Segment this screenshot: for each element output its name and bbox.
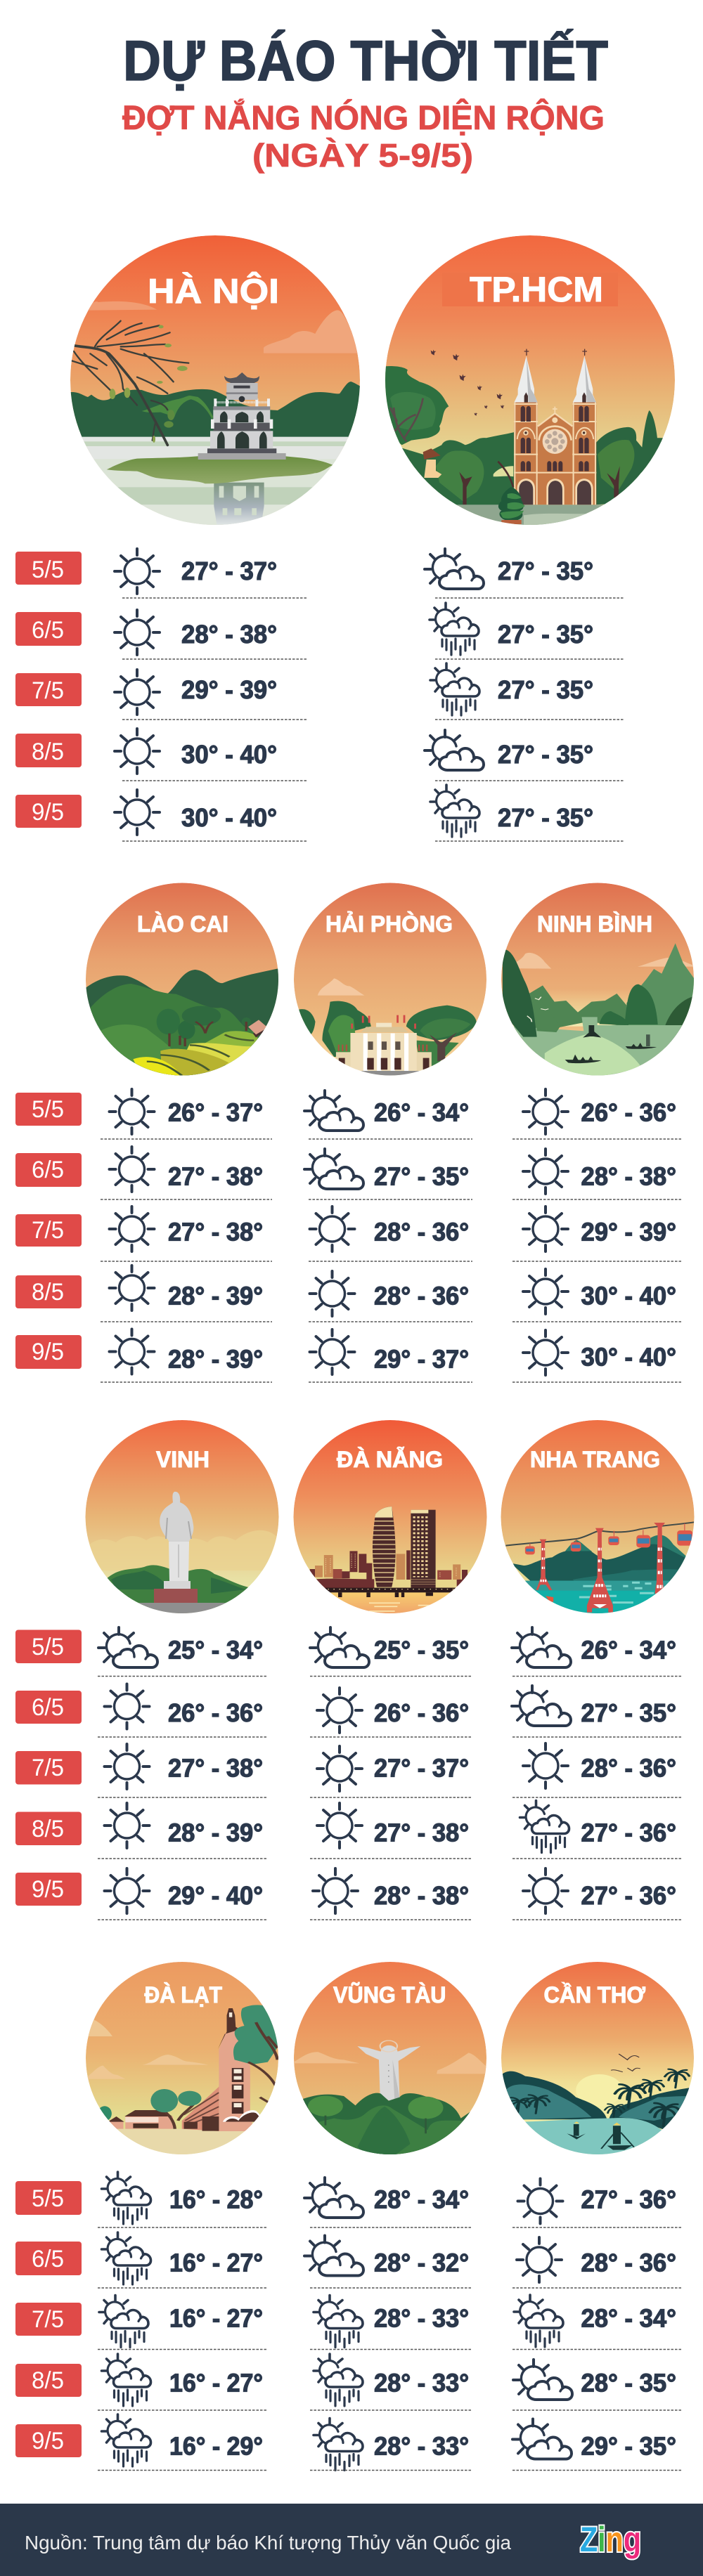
row 8/5 (309, 1271, 469, 1316)
row 8/5 (520, 1800, 676, 1852)
tree (162, 2105, 193, 2129)
scene: Lào Cai (84, 883, 279, 1079)
row 7/5: 27° - 37° (374, 1754, 469, 1782)
row 9/5 (309, 1329, 469, 1374)
forecast: Đà Nẵng (310, 1627, 472, 1920)
date badges (15, 1093, 82, 1369)
date badges: 8/5 (32, 1816, 64, 1842)
date badges: 7/5 (32, 2306, 64, 2333)
row 7/5 (104, 1744, 263, 1789)
date badges: 9/5 (32, 799, 64, 826)
date badges: 8/5 (32, 1279, 64, 1306)
row 5/5: 27° - 36° (581, 2185, 676, 2213)
label: Nha Trang: NHA TRANG (530, 1447, 660, 1472)
trees (157, 1009, 180, 1034)
row 5/5 (310, 1627, 469, 1667)
date badges: 5/5 (32, 1096, 64, 1123)
section: Hà Nội and TP.HCM (15, 235, 675, 841)
row 6/5: 27° - 38° (168, 1162, 263, 1190)
row 9/5 (314, 2419, 469, 2471)
karst mountains (529, 985, 627, 1028)
date badges: 7/5 (32, 1755, 64, 1781)
birds (431, 350, 436, 356)
row 5/5 (110, 1089, 263, 1134)
boats (567, 2133, 586, 2140)
row 7/5: 27° - 38° (168, 1754, 263, 1782)
row 8/5: 28° - 36° (374, 1282, 469, 1310)
row 7/5: 29° - 39° (181, 675, 277, 704)
row 5/5: 27° - 37° (181, 557, 277, 585)
trees left (383, 366, 449, 445)
row 5/5 (523, 1089, 676, 1134)
scene: Hải Phòng (294, 883, 486, 1076)
row 6/5 (430, 603, 593, 655)
row 9/5: 30° - 40° (581, 1342, 676, 1372)
row 8/5: 27° - 36° (581, 1819, 676, 1847)
row 5/5: 26° - 34° (581, 1636, 676, 1664)
row 9/5: 28° - 33° (374, 2431, 469, 2461)
row 6/5: 26° - 36° (168, 1698, 263, 1727)
bridge (325, 1588, 457, 1592)
island (107, 456, 333, 483)
row 8/5 (513, 2360, 676, 2400)
date badges: 6/5 (32, 1694, 64, 1721)
date badges: 9/5 (32, 1339, 64, 1365)
row 8/5: 28° - 33° (374, 2368, 469, 2398)
row 6/5 (115, 610, 277, 655)
row 7/5: 28° - 34° (581, 2303, 676, 2333)
row 9/5 (523, 1868, 676, 1913)
row 9/5: 29° - 40° (168, 1881, 263, 1910)
mountains (565, 1535, 689, 1559)
row 8/5 (101, 2354, 263, 2406)
main building (125, 2116, 173, 2129)
date badges: 5/5 (32, 557, 64, 583)
forecast: Hải Phòng (304, 1091, 472, 1382)
source: Nguồn: Trung tâm dự báo Khí tượng Thủy văn Quốc gia (25, 2532, 511, 2554)
forecast: Lào Cai (101, 1089, 272, 1382)
row 8/5 (317, 1803, 469, 1848)
row 7/5: 28° - 33° (374, 2303, 469, 2333)
row 8/5 (110, 1266, 263, 1310)
row 8/5 (425, 730, 593, 770)
row 5/5: 25° - 35° (374, 1636, 469, 1664)
row 8/5: 28° - 35° (581, 2368, 676, 2398)
title: DỰ BÁO THỜI TIẾT (123, 29, 608, 93)
tower 1 (373, 1507, 396, 1587)
hills (301, 2093, 486, 2157)
row 6/5 (101, 2232, 263, 2284)
gondolas (530, 1523, 685, 1547)
tree right (233, 2005, 283, 2064)
date badges (15, 1630, 82, 1906)
Turtle Tower (198, 372, 286, 460)
row 5/5: 28° - 34° (374, 2185, 469, 2213)
tower 2 (411, 1510, 436, 1588)
row 9/5 (110, 1329, 263, 1374)
row 9/5: 16° - 29° (169, 2431, 263, 2461)
subtitle: (NGÀY 5-9/5) (252, 137, 473, 174)
ground (457, 505, 604, 525)
label: Hải Phòng: HẢI PHÒNG (325, 911, 453, 937)
subtitle: ĐỢT NẮNG NÓNG DIỆN RỘNG (122, 98, 605, 137)
trees right (595, 410, 663, 505)
row 9/5 (104, 1868, 263, 1913)
sea (505, 1581, 697, 1616)
date badges: 6/5 (32, 1157, 64, 1183)
row 6/5: 28° - 32° (374, 2249, 469, 2277)
forecast: TP.HCM (425, 549, 624, 841)
label: Cần Thơ: CẦN THƠ (544, 1982, 646, 2008)
section: Lào Cai, Hải Phòng, Ninh Bình (15, 883, 697, 1382)
forecast: Ninh Bình (512, 1089, 683, 1382)
row 5/5 (304, 1091, 469, 1131)
house (253, 1030, 264, 1038)
date badges: 9/5 (32, 1876, 64, 1903)
forecast: Nha Trang (512, 1627, 683, 1920)
scalloped roof (223, 2110, 263, 2122)
date badges: 5/5 (32, 2185, 64, 2212)
row 5/5: 26° - 37° (168, 1098, 263, 1127)
trees (299, 1009, 316, 1034)
label: Đà Lạt: ĐÀ LẠT (145, 1982, 222, 2008)
row 8/5 (115, 729, 277, 774)
row 9/5: 29° - 35° (581, 2431, 676, 2461)
label: TP.HCM: TP.HCM (470, 270, 603, 309)
potted plant (498, 462, 513, 487)
date badges: 8/5 (32, 2367, 64, 2394)
reflection (214, 483, 264, 525)
row 7/5: 28° - 36° (581, 1754, 676, 1782)
label: Lào Cai: LÀO CAI (137, 911, 228, 937)
row 7/5 (110, 1206, 263, 1251)
label: Vũng Tàu: VŨNG TÀU (333, 1982, 446, 2008)
row 9/5 (512, 2419, 676, 2461)
row 6/5: 28° - 38° (181, 620, 277, 649)
row 7/5 (314, 2295, 469, 2347)
row 7/5 (514, 2295, 676, 2347)
row 9/5: 27° - 35° (498, 803, 593, 832)
row 7/5 (99, 2295, 263, 2347)
scene: Ninh Bình (501, 883, 697, 1078)
opera house (336, 1015, 432, 1076)
row 7/5: 29° - 39° (581, 1217, 676, 1247)
row 7/5 (523, 1206, 676, 1251)
date badges: 6/5 (32, 2246, 64, 2272)
scene: Nha Trang (501, 1420, 697, 1616)
cable (505, 1522, 694, 1546)
Ho Chi Minh statue (154, 1492, 198, 1603)
forecast: Hà Nội (115, 549, 308, 841)
footer (0, 2504, 703, 2576)
row 5/5: 16° - 28° (169, 2185, 263, 2213)
scene: Vũng Tàu (291, 1962, 490, 2157)
branch (72, 321, 188, 445)
row 6/5: 26° - 36° (374, 1698, 469, 1727)
row 5/5 (115, 549, 277, 594)
row 9/5 (523, 1330, 676, 1375)
label: Đà Nẵng: ĐÀ NẴNG (337, 1447, 443, 1472)
row 5/5 (512, 1627, 676, 1667)
row 6/5: 28° - 36° (581, 2249, 676, 2277)
row 5/5 (98, 1627, 263, 1667)
row 5/5 (517, 2178, 676, 2223)
row 7/5: 28° - 36° (374, 1217, 469, 1247)
label: Ninh Bình: NINH BÌNH (537, 911, 652, 937)
rice terraces (205, 1031, 258, 1064)
date badges: 6/5 (32, 617, 64, 644)
row 8/5: 27° - 38° (374, 1819, 469, 1847)
hills (500, 2071, 607, 2119)
river (513, 1017, 682, 1075)
row 5/5 (101, 2172, 263, 2224)
row 7/5: 27° - 35° (498, 675, 593, 704)
row 9/5: 27° - 36° (581, 1881, 676, 1910)
row 6/5 (523, 1149, 676, 1194)
row 8/5: 27° - 35° (498, 740, 593, 769)
forecast: Cần Thơ (512, 2178, 683, 2471)
row 9/5 (101, 2414, 263, 2466)
row 5/5: 27° - 35° (498, 557, 593, 585)
tower (219, 2027, 250, 2131)
date badges: 5/5 (32, 1634, 64, 1660)
date badges: 8/5 (32, 739, 64, 765)
row 7/5 (523, 1743, 676, 1788)
row 6/5 (517, 2237, 676, 2282)
hills (105, 1565, 252, 1609)
row 7/5 (309, 1206, 469, 1251)
row 6/5 (104, 1684, 263, 1729)
row 6/5: 28° - 38° (581, 1162, 676, 1190)
small building (110, 2121, 123, 2129)
date badges (15, 552, 82, 828)
water (82, 437, 349, 505)
row 5/5: 26° - 34° (374, 1098, 469, 1127)
forecast: Vinh (98, 1627, 267, 1920)
row 8/5: 30° - 40° (181, 740, 277, 769)
seagulls (527, 997, 548, 1022)
scene: Đà Nẵng (294, 1420, 486, 1616)
row 8/5 (104, 1803, 263, 1848)
row 7/5: 27° - 38° (168, 1217, 263, 1247)
scene: TP.HCM (383, 235, 675, 527)
section: Vinh, Đà Nẵng, Nha Trang (15, 1420, 697, 1920)
row 6/5 (317, 1688, 469, 1733)
water (525, 2118, 697, 2157)
Notre Dame cathedral (514, 349, 596, 505)
palms (665, 2069, 689, 2088)
row 5/5 (304, 2178, 469, 2218)
Christ statue (357, 2041, 420, 2101)
label: Hà Nội: HÀ NỘI (148, 272, 279, 311)
row 8/5: 30° - 40° (581, 1282, 676, 1310)
row 9/5 (430, 785, 593, 837)
forecast: Vũng Tàu (304, 2178, 472, 2471)
house (423, 448, 441, 460)
date badges: 7/5 (32, 1217, 64, 1244)
row 6/5 (110, 1147, 263, 1192)
row 6/5 (512, 1686, 676, 1727)
row 9/5: 30° - 40° (181, 803, 277, 832)
logo: Zing: Zing (580, 2520, 641, 2559)
label: Vinh: VINH (156, 1447, 209, 1472)
leaves (110, 325, 188, 443)
row 8/5 (523, 1269, 676, 1314)
row 6/5: 27° - 35° (498, 620, 593, 649)
row 9/5: 28° - 38° (374, 1881, 469, 1910)
row 9/5: 28° - 39° (168, 1345, 263, 1373)
row 6/5: 27° - 35° (581, 1698, 676, 1727)
row 6/5: 16° - 27° (169, 2249, 263, 2277)
cable towers (536, 1523, 665, 1613)
row 8/5: 16° - 27° (169, 2368, 263, 2398)
row 8/5: 28° - 39° (168, 1282, 263, 1310)
skyline (315, 1554, 460, 1580)
row 5/5: 26° - 36° (581, 1098, 676, 1127)
row 7/5 (430, 663, 593, 715)
row 8/5 (314, 2354, 469, 2406)
date badges: 7/5 (32, 677, 64, 704)
subtitle (122, 98, 605, 174)
scene: Hà Nội (67, 235, 364, 528)
scene: Vinh (84, 1420, 281, 1617)
row 6/5: 27° - 35° (374, 1162, 469, 1190)
row 9/5 (115, 790, 277, 835)
date badges (15, 2181, 82, 2457)
section: Đà Lạt, Vũng Tàu, Cần Thơ (15, 1962, 697, 2471)
wing (182, 2087, 219, 2131)
row 9/5: 29° - 37° (374, 1345, 469, 1373)
date badges: 9/5 (32, 2428, 64, 2454)
scene: Cần Thơ (500, 1962, 697, 2157)
water (330, 1592, 450, 1613)
row 7/5: 16° - 27° (169, 2303, 263, 2333)
row 8/5: 28° - 39° (168, 1819, 263, 1847)
row 7/5 (115, 670, 277, 715)
scene: Đà Lạt (84, 1962, 283, 2157)
row 6/5 (304, 2236, 469, 2277)
boats (565, 1060, 601, 1063)
mountains (69, 382, 364, 438)
row 6/5 (304, 1149, 469, 1190)
row 5/5 (425, 549, 593, 589)
row 7/5 (317, 1746, 469, 1791)
row 9/5 (313, 1868, 469, 1913)
row 5/5: 25° - 34° (168, 1636, 263, 1664)
forecast: Đà Lạt (98, 2172, 267, 2471)
